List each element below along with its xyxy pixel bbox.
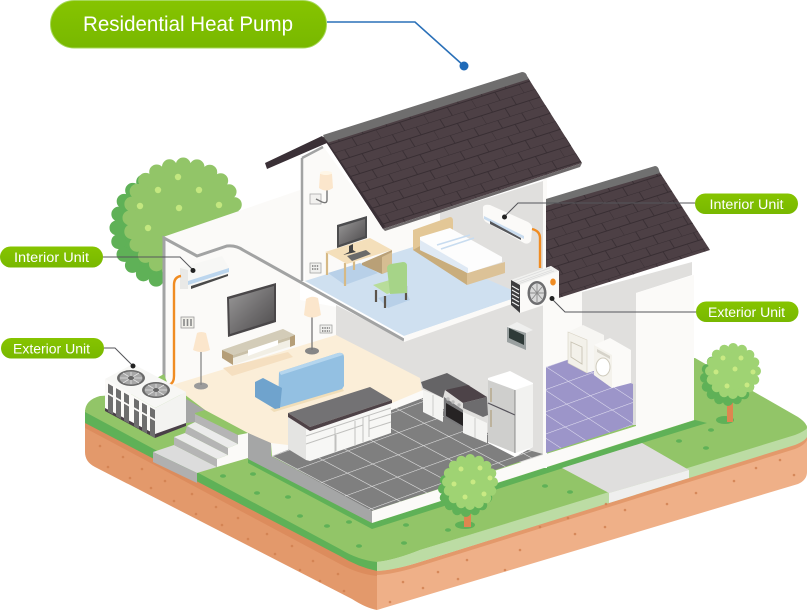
house shell xyxy=(163,146,707,529)
foundation side xyxy=(248,433,372,523)
green patch behind outdoor unit xyxy=(153,374,168,385)
refrigerant pipe, left xyxy=(168,276,181,385)
gray wedge behind steps xyxy=(186,399,205,423)
foundation white front xyxy=(372,412,694,523)
soil edge shadow right xyxy=(377,436,807,575)
indoor AC, right xyxy=(483,205,532,244)
upper room gable wall xyxy=(302,146,440,300)
label: interior unit right: Interior Unit xyxy=(710,197,784,212)
leader: exterior unit right xyxy=(550,296,696,312)
island counter xyxy=(288,387,392,461)
sofa xyxy=(255,353,344,412)
laundry back wall xyxy=(582,262,692,392)
roof: main xyxy=(265,72,582,231)
wall switch xyxy=(181,317,194,328)
living room left wall xyxy=(163,190,336,395)
upper floor white slab edge xyxy=(404,299,512,342)
leader: interior unit right xyxy=(502,203,695,220)
bed xyxy=(413,217,505,285)
slab xyxy=(153,445,217,473)
desk floor shadow xyxy=(328,263,378,285)
fan 1 xyxy=(117,370,145,386)
soil: right face xyxy=(377,436,807,610)
floor lamp right xyxy=(304,297,321,354)
ground block xyxy=(85,358,807,610)
label: exterior unit right xyxy=(696,302,798,322)
tv stand xyxy=(222,329,295,376)
wall outlet lower xyxy=(320,325,332,333)
grass: right side band xyxy=(377,425,807,571)
eave xyxy=(383,163,582,231)
ridge xyxy=(323,72,529,143)
label: interior unit right xyxy=(695,194,798,214)
title xyxy=(50,0,326,48)
exterior unit, left xyxy=(105,364,186,438)
laundry white wall section xyxy=(546,290,582,369)
roof overhang xyxy=(265,136,327,169)
electrical panel xyxy=(507,322,533,350)
kitchen tile floor xyxy=(272,398,543,511)
tree, front xyxy=(443,459,493,529)
title connector xyxy=(327,22,468,70)
upper room divider post xyxy=(302,147,323,281)
upper room floor xyxy=(305,247,512,336)
soil edge shadow left xyxy=(85,420,377,576)
chair xyxy=(373,262,407,308)
wall outlet upper xyxy=(310,263,321,273)
laundry purple floor xyxy=(546,359,633,453)
steps xyxy=(153,399,248,483)
grass specks xyxy=(220,428,714,548)
treads and risers xyxy=(174,437,217,467)
label: exterior unit right: Exterior Unit xyxy=(708,305,785,320)
laundry appliances xyxy=(568,325,631,388)
label: exterior unit left: Exterior Unit xyxy=(13,342,90,356)
grass: left side band xyxy=(85,410,377,571)
label: exterior unit left xyxy=(1,338,104,358)
right wall panel xyxy=(636,275,694,438)
refrigerator xyxy=(488,371,533,457)
wall lamp xyxy=(310,171,333,204)
tree, right xyxy=(705,348,756,424)
fan 2 xyxy=(142,382,170,398)
divider wall strip xyxy=(543,178,547,468)
label: interior unit left xyxy=(0,246,103,268)
indoor AC, left xyxy=(180,256,229,289)
green shadow line along foundation xyxy=(248,420,707,529)
stair stringer xyxy=(217,433,248,467)
dryer xyxy=(568,325,604,373)
roof: laundry wing xyxy=(546,166,710,302)
leader: exterior unit left xyxy=(104,348,136,368)
chair floor shadow xyxy=(378,290,410,308)
floor lamp left xyxy=(193,332,210,390)
back counter and stove xyxy=(421,373,488,443)
leader: interior unit left xyxy=(103,257,196,273)
upper room furniture xyxy=(310,171,505,308)
grass: top surface xyxy=(85,358,807,562)
path: side walkway xyxy=(562,443,689,503)
washing machine xyxy=(594,338,631,388)
label: interior unit left: Interior Unit xyxy=(14,250,89,265)
title: Residential Heat Pump xyxy=(83,13,293,36)
living room floor xyxy=(172,335,423,447)
exterior unit, right xyxy=(511,266,559,313)
white slab edge behind island xyxy=(271,390,423,457)
soil specks xyxy=(99,445,795,603)
gray structural outline xyxy=(164,238,404,378)
television xyxy=(227,283,276,337)
upper room back wall xyxy=(440,181,543,300)
laundry wall end xyxy=(633,384,636,425)
big background tree xyxy=(117,165,236,281)
refrigerant pipe, right xyxy=(532,229,540,268)
desk xyxy=(325,238,392,286)
roof shingles xyxy=(323,73,582,229)
vents xyxy=(108,384,155,438)
monitor xyxy=(337,216,371,261)
stand shadow rug xyxy=(223,352,293,376)
gable edge xyxy=(322,136,385,229)
kitchen xyxy=(248,371,694,523)
soil: left face xyxy=(85,420,377,610)
lower room back wall xyxy=(336,292,543,462)
lower living room xyxy=(168,256,423,457)
